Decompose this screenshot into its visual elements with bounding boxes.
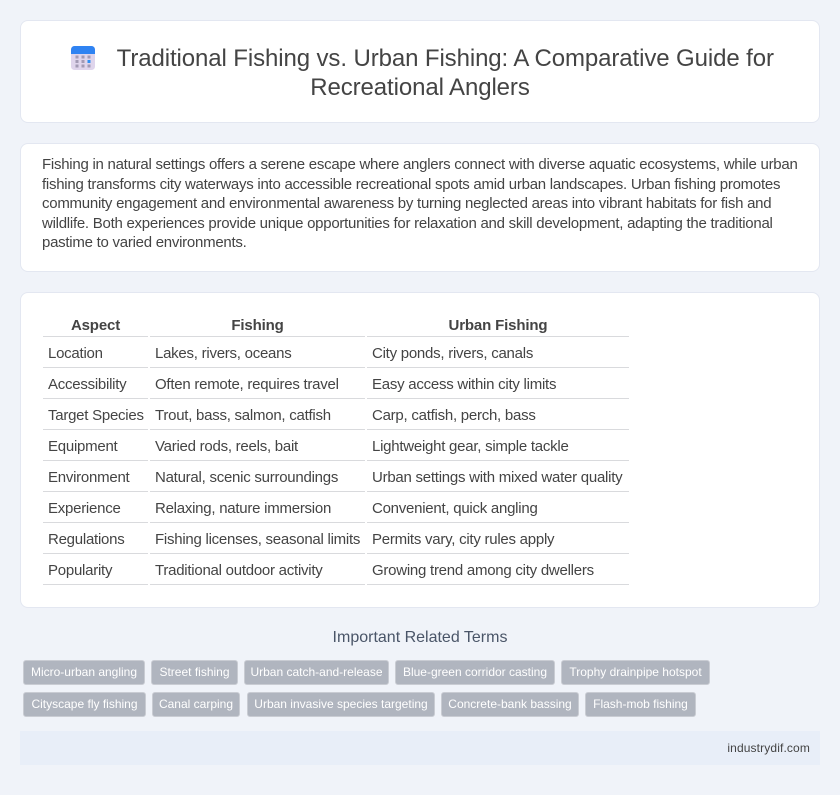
related term tags: Urban catch-and-release <box>250 665 383 679</box>
comparison table: Easy access within city limits <box>372 376 556 393</box>
related term tags <box>23 660 710 717</box>
comparison table: Urban Fishing <box>449 317 547 334</box>
comparison table: Experience <box>48 500 121 517</box>
related term tags: Urban invasive species targeting <box>254 697 428 711</box>
comparison table: Often remote, requires travel <box>155 376 339 393</box>
comparison table: Fishing <box>231 317 284 334</box>
related term tags: Flash-mob fishing <box>593 697 688 711</box>
comparison table: Environment <box>48 469 129 486</box>
related term tags: Concrete-bank bassing <box>448 697 572 711</box>
panel: intro text <box>20 143 820 272</box>
footer source: industrydif.com <box>727 741 810 755</box>
comparison table: Regulations <box>48 531 124 548</box>
comparison table: Location <box>48 345 103 362</box>
intro paragraph: community engagement and environmental awareness by turning neglected areas into vibrant habitats for fish and <box>42 195 771 212</box>
panel: comparison table <box>20 292 820 608</box>
comparison table: Permits vary, city rules apply <box>372 531 554 548</box>
comparison table: Popularity <box>48 562 112 579</box>
related term tags: Micro-urban angling <box>31 665 137 679</box>
title <box>117 45 774 101</box>
comparison table: Fishing licenses, seasonal limits <box>155 531 360 548</box>
related term tags: Blue-green corridor casting <box>403 665 547 679</box>
intro paragraph: fishing transforms city waterways into accessible recreational spots amid urban landscapes. Urban fishing promotes <box>42 176 780 192</box>
comparison table: Growing trend among city dwellers <box>372 562 594 579</box>
comparison table: Urban settings with mixed water quality <box>372 469 622 486</box>
comparison table: Trout, bass, salmon, catfish <box>155 407 331 424</box>
comparison table: Lakes, rivers, oceans <box>155 345 291 362</box>
icon: calendar <box>71 46 95 70</box>
comparison table: Lightweight gear, simple tackle <box>372 438 569 455</box>
title: Traditional Fishing vs. Urban Fishing: A Comparative Guide for <box>117 45 774 72</box>
related term tags: Canal carping <box>159 697 233 711</box>
intro paragraph <box>42 156 798 251</box>
comparison table: Aspect <box>71 317 120 334</box>
comparison table: Traditional outdoor activity <box>155 562 323 579</box>
comparison table: Natural, scenic surroundings <box>155 469 338 486</box>
comparison table: Relaxing, nature immersion <box>155 500 331 517</box>
heading: related terms: Important Related Terms <box>333 629 507 646</box>
footer bar <box>20 731 820 765</box>
related term tags: Street fishing <box>159 665 230 679</box>
comparison table: Accessibility <box>48 376 126 393</box>
intro paragraph: pastime to varied environments. <box>42 234 247 251</box>
comparison table <box>43 317 629 585</box>
comparison table: Carp, catfish, perch, bass <box>372 407 536 424</box>
title: Recreational Anglers <box>310 74 530 101</box>
comparison table: Varied rods, reels, bait <box>155 438 298 455</box>
intro paragraph: wildlife. Both experiences provide unique opportunities for relaxation and skill development, adapting the traditional <box>42 214 773 232</box>
related term tags: Cityscape fly fishing <box>31 697 138 711</box>
panel: header <box>20 20 820 123</box>
comparison table: Target Species <box>48 407 144 424</box>
intro paragraph: Fishing in natural settings offers a serene escape where anglers connect with diverse aquatic ecosystems, while urban <box>42 156 798 173</box>
comparison table: City ponds, rivers, canals <box>372 345 533 362</box>
related term tags: Trophy drainpipe hotspot <box>569 665 702 679</box>
comparison table: Equipment <box>48 438 117 455</box>
comparison table: Convenient, quick angling <box>372 500 538 517</box>
